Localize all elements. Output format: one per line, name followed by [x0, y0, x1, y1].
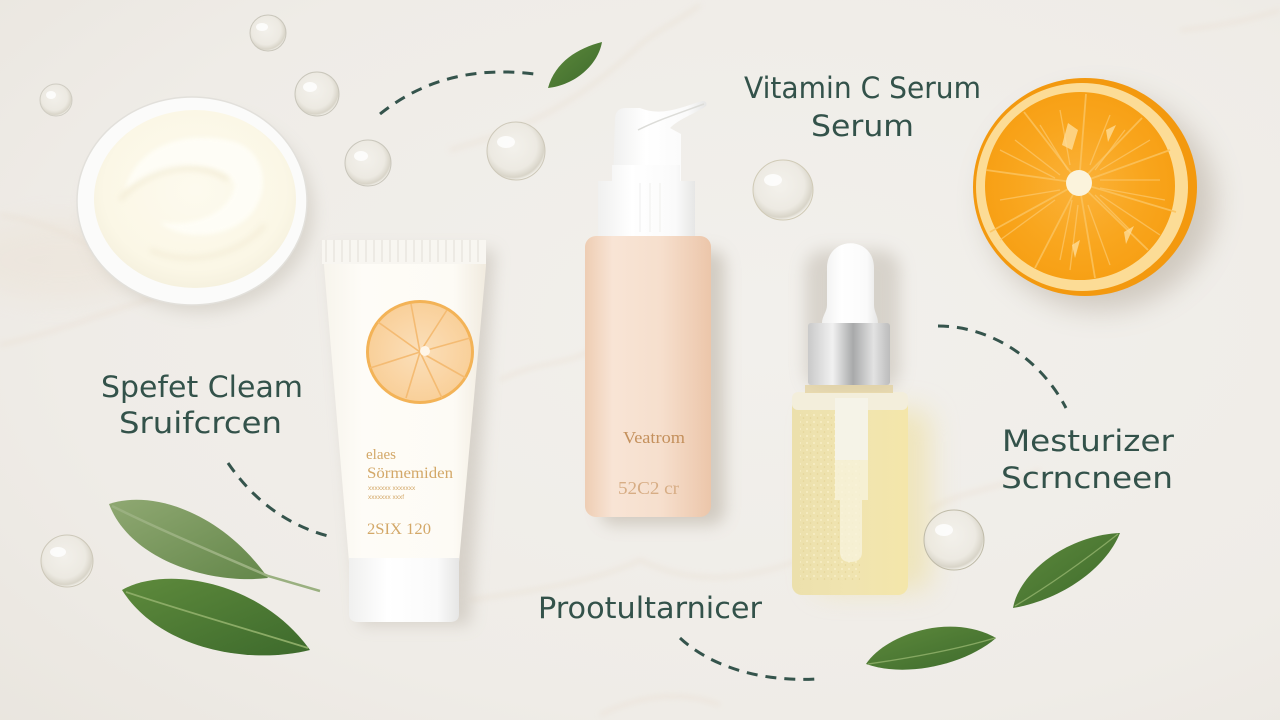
- label: Mesturizer: [1001, 424, 1174, 495]
- silver collar: [808, 323, 890, 385]
- tube label: Sörmemiden: [367, 465, 453, 482]
- tube label: 2SIX 120: [367, 521, 431, 538]
- dashed connector: bottom: [680, 638, 816, 679]
- pump collar: [598, 165, 695, 236]
- tube label: elaes: [366, 447, 396, 463]
- leaf: left lower: [122, 579, 310, 655]
- bottle label: 52C2 cr: [618, 478, 679, 498]
- tube label: xxxxxxx xxxxxxx: [368, 485, 416, 492]
- label: Vitamin C Serum: [744, 71, 981, 143]
- halved orange: [973, 78, 1215, 310]
- bottle body: [585, 236, 711, 517]
- tube cap: [349, 558, 459, 622]
- pump nozzle: [613, 101, 706, 182]
- water droplets: [40, 15, 984, 587]
- glass bottle: [792, 392, 908, 595]
- label: Vitamin C Serum: Serum: [811, 109, 914, 143]
- label: Spefet Cleam: Spefet Cleam: [101, 370, 303, 404]
- dropper serum bottle: [792, 243, 930, 595]
- label: Protultarnicer: Prootultarnicer: [538, 591, 762, 625]
- dashed connector: left: [228, 463, 328, 536]
- cream jar: [77, 97, 314, 312]
- pump bottle: [585, 101, 725, 525]
- leaf: top: [548, 42, 602, 88]
- dropper bulb: [822, 243, 878, 323]
- label: Spefet Cleam: Sruifcrcen: [119, 406, 282, 440]
- orange slice print: [366, 300, 474, 404]
- dropper pipette: [835, 398, 868, 562]
- label: Mesturizer: Mesturizer: [1002, 424, 1174, 458]
- tube label: xxxxxxx xxxf: [368, 494, 404, 501]
- label: Spefet Cleam: [101, 370, 303, 440]
- cream tube: [322, 240, 495, 625]
- label: Mesturizer: Scrncneen: [1001, 461, 1173, 495]
- leaf: left upper: [109, 500, 320, 591]
- dashed connector: top: [380, 72, 534, 114]
- leaf: right: [1013, 533, 1120, 608]
- dashed connector: right: [938, 326, 1066, 408]
- bottle label: [618, 428, 685, 498]
- bottle label: Veatrom: [623, 428, 685, 447]
- tube label: [366, 447, 453, 538]
- leaf: bottom: [866, 627, 996, 670]
- label: Vitamin C Serum: Vitamin C Serum: [744, 71, 981, 105]
